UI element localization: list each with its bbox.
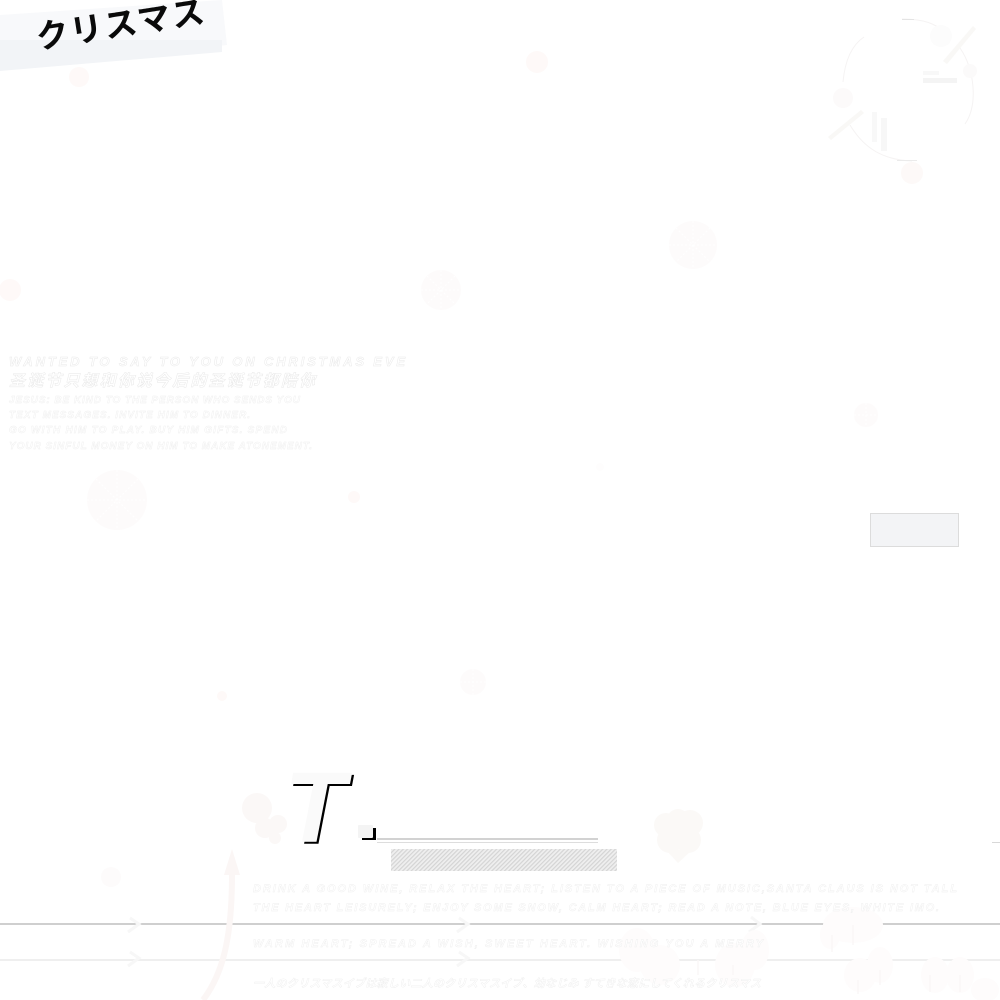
curved arrow bbox=[203, 849, 240, 1000]
body text block: YOUR SINFUL MONEY ON HIM TO MAKE ATONEMENT. bbox=[9, 441, 312, 452]
flower cluster bbox=[242, 793, 287, 844]
circular badge bbox=[828, 19, 977, 184]
decorative pale dots bbox=[0, 51, 604, 701]
body text block bbox=[9, 395, 312, 452]
lower text: line 1: DRINK A GOOD WINE, RELAX THE HEART; LISTEN TO A PIECE OF MUSIC,SANTA CLAUS IS NOT TALL bbox=[253, 883, 957, 895]
big letter T: T bbox=[284, 752, 353, 864]
big letter T: T bbox=[286, 754, 355, 866]
pine trees bbox=[619, 907, 999, 1000]
chevron arrows bbox=[128, 917, 760, 966]
body text block: GO WITH HIM TO PLAY. BUY HIM GIFTS. SPEND bbox=[9, 425, 287, 436]
double rule bbox=[377, 838, 598, 843]
hatched bar bbox=[391, 849, 617, 871]
heading: English: WANTED TO SAY TO YOU ON CHRISTMAS EVE bbox=[9, 354, 405, 369]
body text block: TEXT MESSAGES. INVITE HIM TO DINNER. bbox=[9, 410, 250, 421]
square dot bbox=[358, 825, 376, 840]
snowflake texture bbox=[87, 221, 878, 695]
heading: Chinese: 圣诞节只想和你说今后的圣诞节都陪你 bbox=[9, 372, 318, 390]
lower text: line 3: WARM HEART; SPREAD A WISH, SWEET HEART. WISHING YOU A MERRY bbox=[253, 938, 765, 950]
lower text: line 2: THE HEART LEISURELY; ENJOY SOME SNOW, CALM HEART; READ A NOTE, BLUE EYES, WHITE IMO. bbox=[253, 902, 939, 914]
snowflakes bbox=[87, 221, 878, 887]
grey box bbox=[870, 514, 958, 546]
body text block: JESUS: BE KIND TO THE PERSON WHO SENDS YOU bbox=[9, 395, 301, 406]
banner bbox=[0, 0, 227, 71]
lower text: Japanese line: 一人のクリスマスイブは寂しい二人のクリスマスイブ、幼なじみ すてきな恋にしてくれるクリスマス bbox=[253, 977, 762, 990]
horizontal lines bbox=[0, 842, 1000, 961]
flower bbox=[654, 809, 703, 863]
